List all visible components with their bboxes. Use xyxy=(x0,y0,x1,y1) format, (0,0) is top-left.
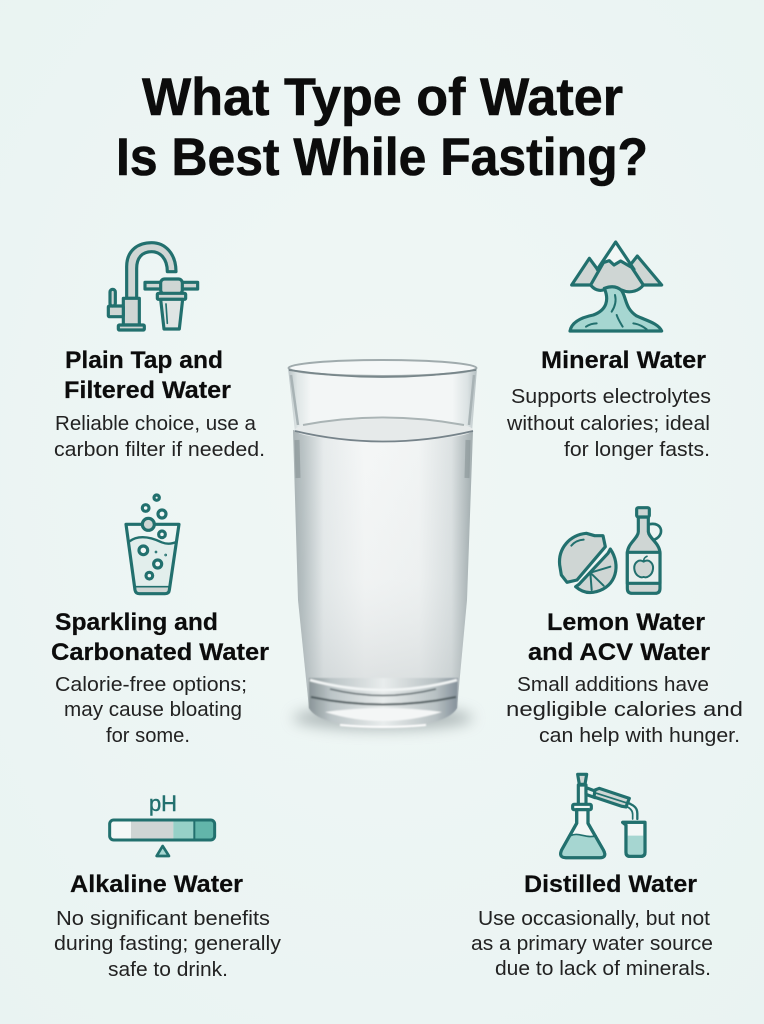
title: Is Best While Fasting? xyxy=(116,128,648,187)
icon: mountains and stream xyxy=(570,242,662,331)
pH label: pH xyxy=(149,791,177,816)
heading: Lemon Water xyxy=(547,609,705,636)
description: Supports electrolytes xyxy=(511,385,711,408)
description xyxy=(506,673,743,747)
description: may cause bloating xyxy=(64,698,242,721)
glass upper wall xyxy=(288,368,477,432)
description: Small additions have xyxy=(517,673,709,696)
panel: plain tap and filtered water xyxy=(54,243,265,461)
heading: Mineral Water xyxy=(541,347,706,374)
description: for longer fasts. xyxy=(564,438,710,461)
description: Calorie-free options; xyxy=(55,673,247,696)
description: can help with hunger. xyxy=(539,724,740,747)
water body xyxy=(293,430,473,727)
heading xyxy=(51,609,269,666)
glass rim xyxy=(288,360,476,478)
description: Use occasionally, but not xyxy=(478,907,710,930)
description xyxy=(506,385,711,461)
panel: alkaline water xyxy=(54,791,282,981)
description: due to lack of minerals. xyxy=(495,957,711,980)
heading: Distilled Water xyxy=(524,871,697,898)
description: without calories; ideal xyxy=(506,412,710,435)
description xyxy=(54,412,265,461)
heading: Sparkling and xyxy=(55,609,218,636)
water surface xyxy=(295,418,473,442)
description xyxy=(471,907,713,980)
icon: lemon slice xyxy=(560,533,616,593)
panel: sparkling and carbonated water xyxy=(51,495,269,747)
heading: Carbonated Water xyxy=(51,639,269,666)
description: carbon filter if needed. xyxy=(54,438,265,461)
panel: mineral water xyxy=(506,242,711,461)
glass shadow xyxy=(293,706,473,730)
icon: tap with filter xyxy=(108,243,198,330)
description: negligible calories and xyxy=(506,698,743,721)
title: What Type of Water xyxy=(142,68,623,127)
description xyxy=(55,673,247,747)
description: Reliable choice, use a xyxy=(55,412,257,435)
heading: Filtered Water xyxy=(64,377,231,404)
icon: sparkling glass with bubbles xyxy=(126,495,179,594)
description: for some. xyxy=(106,724,190,747)
description: No significant benefits xyxy=(56,907,270,930)
icon: vinegar bottle xyxy=(627,508,661,593)
panel: lemon water and acv water xyxy=(506,508,743,747)
pH bar xyxy=(110,820,215,856)
heading: and ACV Water xyxy=(528,639,710,666)
icon: pH scale xyxy=(110,791,215,856)
glass base xyxy=(309,678,458,727)
description xyxy=(54,907,282,981)
heading xyxy=(64,347,231,404)
icon: distillation apparatus xyxy=(561,774,645,858)
panel: distilled water xyxy=(471,774,713,980)
panel: glass of water xyxy=(288,360,477,730)
heading: Alkaline Water xyxy=(70,871,243,898)
heading xyxy=(528,609,710,666)
description: as a primary water source xyxy=(471,932,713,955)
description: safe to drink. xyxy=(108,958,228,981)
heading: Plain Tap and xyxy=(65,347,223,374)
title xyxy=(116,68,648,187)
description: during fasting; generally xyxy=(54,932,282,955)
